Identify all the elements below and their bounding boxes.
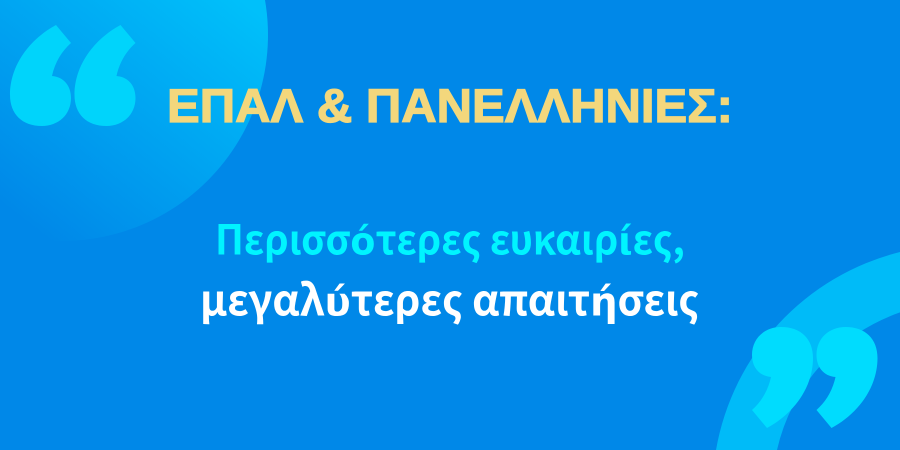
subtitle line 1: Περισσότερες ευκαιρίες, (215, 206, 685, 266)
decorative ring bottom right (716, 252, 900, 450)
decorative circle top left (0, 0, 268, 241)
subtitle line 2: μεγαλύτερες απαιτήσεις (200, 266, 699, 328)
title: ΕΠΑΛ & ΠΑΝΕΛΛΗΝΙΕΣ: (167, 79, 733, 132)
icon: closing quotation marks (752, 327, 878, 428)
icon: opening quotation marks (10, 25, 136, 126)
